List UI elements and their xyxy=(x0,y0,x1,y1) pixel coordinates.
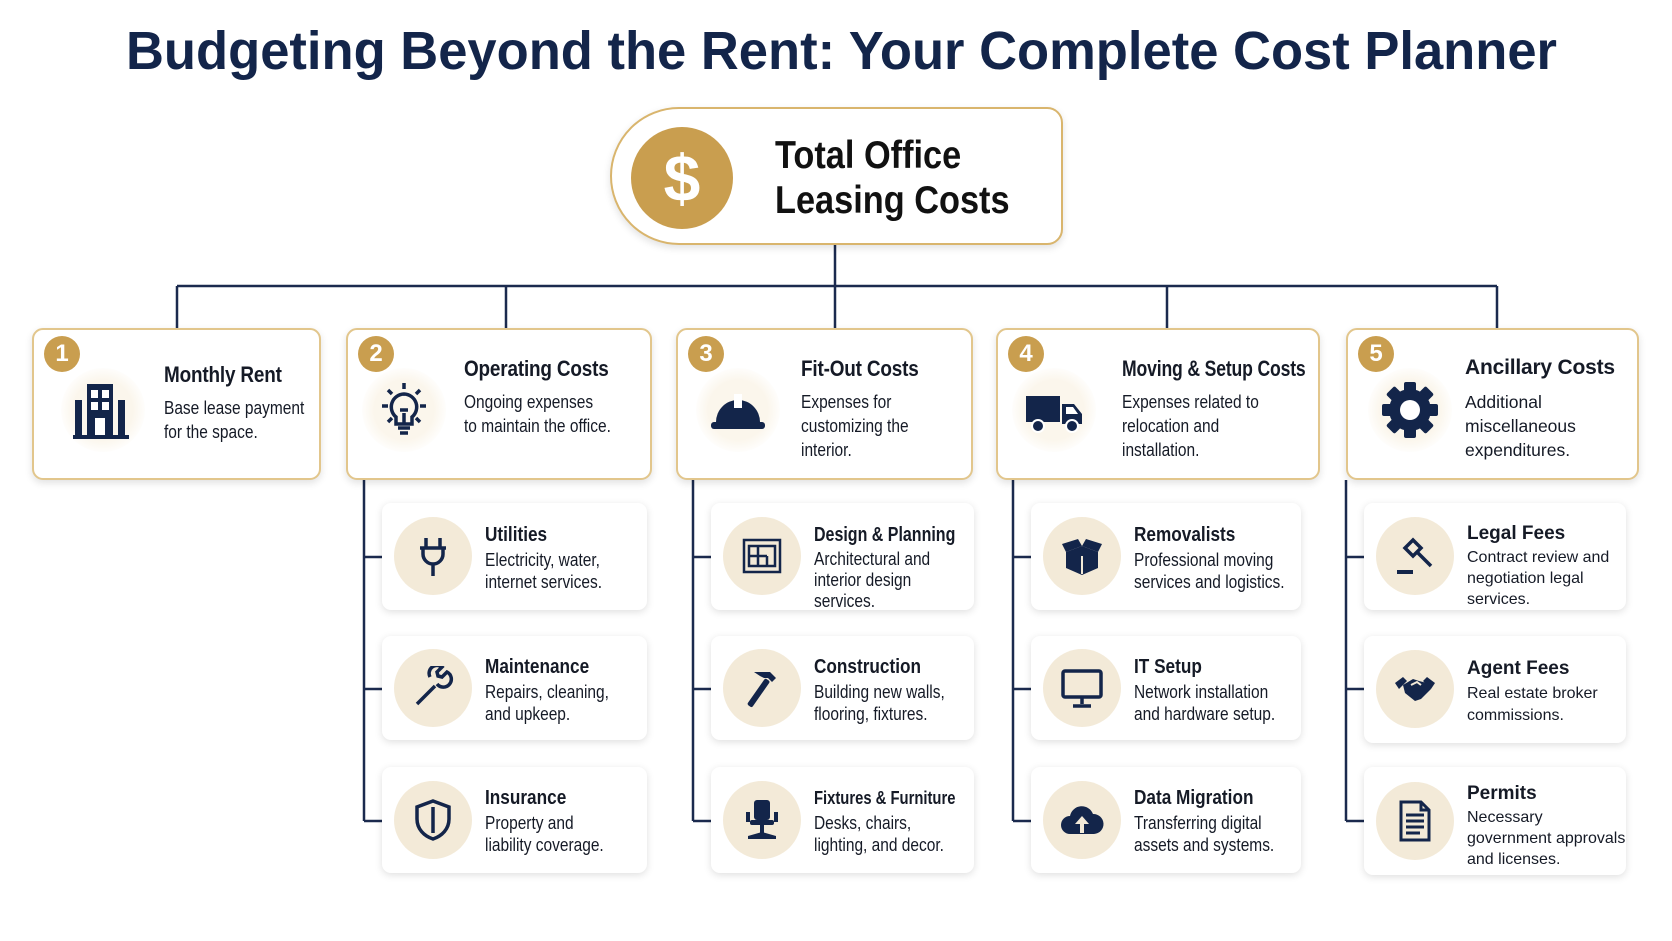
desc xyxy=(1467,549,1609,608)
title: Operating Costs xyxy=(464,356,609,381)
desc: assets and systems. xyxy=(1134,835,1274,855)
badge 5: 5 xyxy=(1369,340,1383,367)
desc: negotiation legal xyxy=(1467,570,1584,587)
desc xyxy=(1134,550,1285,592)
desc: Necessary xyxy=(1467,809,1543,826)
desc: Transferring digital xyxy=(1134,813,1262,833)
desc: services and logistics. xyxy=(1134,572,1285,592)
desc: services. xyxy=(814,591,875,611)
desc xyxy=(1134,813,1274,855)
desc xyxy=(485,682,609,724)
icon: dollar: $ xyxy=(664,141,700,215)
desc xyxy=(801,392,909,460)
icon: bulb xyxy=(362,368,446,452)
sub-panel: removalists xyxy=(1031,503,1301,610)
desc: Desks, chairs, xyxy=(814,813,911,833)
desc: Repairs, cleaning, xyxy=(485,682,609,702)
sub-panel: legal fees xyxy=(1364,503,1626,610)
desc: and hardware setup. xyxy=(1134,704,1275,724)
desc: customizing the xyxy=(801,416,909,436)
icon: plug xyxy=(394,517,472,595)
desc xyxy=(1122,392,1259,460)
desc: and upkeep. xyxy=(485,704,570,724)
icon: chair xyxy=(723,781,801,859)
panel: monthly rent xyxy=(32,328,321,480)
desc xyxy=(814,549,930,611)
desc: Expenses for xyxy=(801,392,891,412)
desc: Real estate broker xyxy=(1467,685,1598,702)
desc: internet services. xyxy=(485,572,602,592)
title: Budgeting Beyond the Rent: Your Complete Cost Planner xyxy=(126,21,1557,81)
title: Data Migration xyxy=(1134,787,1253,809)
desc: Building new walls, xyxy=(814,682,945,702)
badge 4: 4 xyxy=(1019,340,1033,367)
title: Construction xyxy=(814,656,921,678)
icon: blueprint xyxy=(723,517,801,595)
desc: to maintain the office. xyxy=(464,416,611,436)
desc xyxy=(1465,392,1576,460)
badge 5 xyxy=(1358,336,1394,372)
desc xyxy=(814,682,945,724)
desc: interior design xyxy=(814,570,911,590)
title: Utilities xyxy=(485,524,547,546)
badge 2 xyxy=(358,336,394,372)
central heading: Leasing Costs xyxy=(775,179,1010,222)
desc: relocation and xyxy=(1122,416,1219,436)
desc: Architectural and xyxy=(814,549,930,569)
sub-panel: insurance xyxy=(382,767,647,873)
desc xyxy=(1467,809,1625,868)
sub-panel: construction xyxy=(711,636,974,740)
desc xyxy=(1467,685,1598,724)
title: Design & Planning xyxy=(814,524,955,546)
title: Legal Fees xyxy=(1467,523,1565,544)
badge 3 xyxy=(688,336,724,372)
icon: monitor xyxy=(1043,649,1121,727)
title: Monthly Rent xyxy=(164,362,282,387)
desc: Expenses related to xyxy=(1122,392,1259,412)
desc xyxy=(164,398,304,442)
desc: for the space. xyxy=(164,422,258,442)
icon: hard hat xyxy=(696,368,780,452)
desc: Additional xyxy=(1465,392,1542,412)
icon: cloud upload xyxy=(1043,781,1121,859)
title: Moving & Setup Costs xyxy=(1122,356,1306,381)
title: Ancillary Costs xyxy=(1465,356,1615,379)
sub-panel: design & planning xyxy=(711,503,974,610)
badge 1: 1 xyxy=(55,340,69,367)
desc: expenditures. xyxy=(1465,440,1570,460)
badge 2: 2 xyxy=(369,340,383,367)
desc xyxy=(1134,682,1275,724)
desc: flooring, fixtures. xyxy=(814,704,928,724)
desc: liability coverage. xyxy=(485,835,604,855)
title: Fixtures & Furniture xyxy=(814,787,955,808)
desc: Property and xyxy=(485,813,574,833)
desc xyxy=(814,813,944,855)
panel: fit-out costs xyxy=(676,328,973,480)
desc: services. xyxy=(1467,591,1530,608)
desc: commissions. xyxy=(1467,707,1564,724)
desc xyxy=(485,813,604,855)
icon: building xyxy=(61,368,145,452)
desc: Electricity, water, xyxy=(485,550,600,570)
sub-panel: data migration xyxy=(1031,767,1301,873)
desc: Ongoing expenses xyxy=(464,392,593,412)
desc: and licenses. xyxy=(1467,851,1560,868)
panel: ancillary costs xyxy=(1346,328,1639,480)
desc: Base lease payment xyxy=(164,398,304,418)
sub-panel: permits xyxy=(1364,767,1626,875)
icon: wrench xyxy=(394,649,472,727)
badge 3: 3 xyxy=(699,340,713,367)
desc: miscellaneous xyxy=(1465,416,1576,436)
badge 1 xyxy=(44,336,80,372)
title: IT Setup xyxy=(1134,656,1202,678)
panel: moving & setup xyxy=(996,328,1320,480)
title: Removalists xyxy=(1134,524,1235,546)
icon: truck xyxy=(1012,368,1096,452)
sub-panel: maintenance xyxy=(382,636,647,740)
desc xyxy=(464,392,611,436)
title: Agent Fees xyxy=(1467,658,1569,679)
icon: box xyxy=(1043,517,1121,595)
desc xyxy=(485,550,602,592)
desc: Professional moving xyxy=(1134,550,1273,570)
badge 4 xyxy=(1008,336,1044,372)
sub-panel: fixtures & furniture xyxy=(711,767,974,873)
icon: handshake xyxy=(1376,650,1454,728)
central box: total costs xyxy=(610,107,1063,245)
desc: Contract review and xyxy=(1467,549,1609,566)
central heading: Total Office xyxy=(775,134,961,177)
title: Insurance xyxy=(485,787,566,809)
desc: government approvals xyxy=(1467,830,1625,847)
desc: Network installation xyxy=(1134,682,1268,702)
desc: lighting, and decor. xyxy=(814,835,944,855)
icon: hammer xyxy=(723,649,801,727)
sub-panel: IT setup xyxy=(1031,636,1301,740)
desc: interior. xyxy=(801,440,852,460)
icon: dollar xyxy=(631,127,733,229)
icon: gear xyxy=(1368,368,1452,452)
panel: operating costs xyxy=(346,328,652,480)
title: Maintenance xyxy=(485,656,589,678)
desc: installation. xyxy=(1122,440,1199,460)
icon: gavel xyxy=(1376,517,1454,595)
title: Permits xyxy=(1467,783,1537,804)
icon: shield xyxy=(394,781,472,859)
icon: document xyxy=(1376,782,1454,860)
sub-panel: agent fees xyxy=(1364,636,1626,743)
title: Fit-Out Costs xyxy=(801,356,919,381)
central heading xyxy=(775,134,1010,222)
sub-panel: utilities xyxy=(382,503,647,610)
